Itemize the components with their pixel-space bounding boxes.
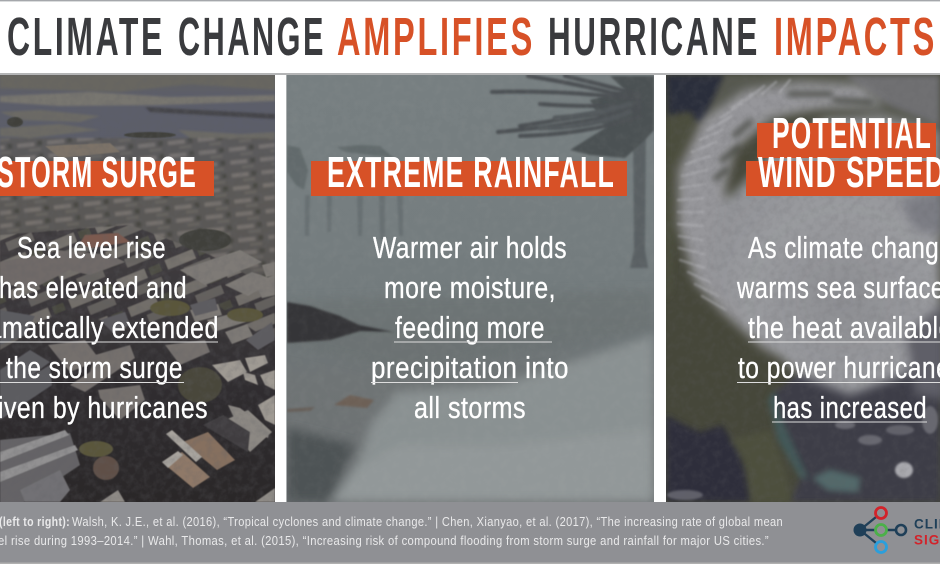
heading bars xyxy=(746,109,940,197)
header rule xyxy=(0,73,940,75)
title: AMPLIFIES xyxy=(337,7,535,67)
citations xyxy=(0,515,783,548)
panel: storm surge xyxy=(0,75,275,505)
citations: Walsh, K. J.E., et al. (2016), “Tropical cyclones and climate change.” | Chen, Xianyao, et al. (2017), “The increasing rate of global mean xyxy=(72,515,783,529)
heading bar: STORM SURGE xyxy=(0,148,197,197)
body text: feeding more xyxy=(395,310,545,345)
body text xyxy=(736,230,940,425)
panel edges xyxy=(286,75,287,502)
body text xyxy=(0,230,219,425)
body text: more moisture, xyxy=(384,270,556,305)
body text: has elevated and xyxy=(0,270,187,305)
body text: precipitation into xyxy=(371,350,569,385)
heading bar: EXTREME RAINFALL xyxy=(327,148,615,197)
body text: the storm surge xyxy=(6,350,183,385)
body text xyxy=(371,230,569,425)
title: CHANGE xyxy=(178,7,326,67)
body text: Warmer air holds xyxy=(373,230,567,265)
citations: el rise during 1993–2014.” | Wahl, Thomas, et al. (2015), “Increasing risk of compound flooding from storm surge and rainfall for major US cities.” xyxy=(0,534,769,548)
heading bar xyxy=(0,148,214,197)
photo: storm-blown palms and surf xyxy=(287,75,654,502)
heading bar xyxy=(311,148,627,197)
panel: potential wind speed xyxy=(666,75,940,502)
title: HURRICANE xyxy=(548,7,760,67)
body text: all storms xyxy=(414,390,526,425)
top rule xyxy=(0,0,940,1)
photo: satellite view of hurricane xyxy=(666,75,940,502)
title xyxy=(7,7,937,67)
footer band xyxy=(0,502,940,564)
photo: flooded neighbourhood xyxy=(0,75,275,505)
logo: climate signals xyxy=(854,508,940,552)
title: CLIMATE xyxy=(7,7,165,67)
panel: extreme rainfall xyxy=(287,75,654,502)
citations: (left to right): xyxy=(0,515,70,529)
body text: Sea level rise xyxy=(17,230,166,265)
